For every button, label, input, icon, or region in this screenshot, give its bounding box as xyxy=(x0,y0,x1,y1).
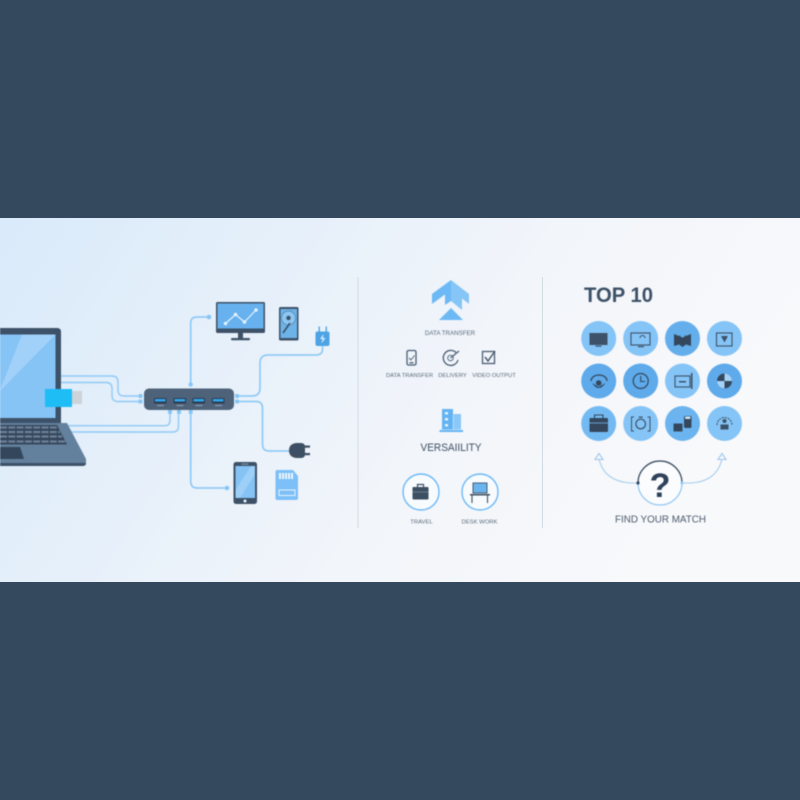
label: delivery: DELIVERY xyxy=(438,373,467,379)
icon: memory card xyxy=(276,470,298,500)
icon: travel briefcase xyxy=(403,474,439,510)
icon: delivery target xyxy=(443,350,459,365)
panel: connectivity diagram xyxy=(0,302,330,504)
cables: laptop to hub xyxy=(61,376,178,432)
laptop xyxy=(0,328,86,466)
icon: building xyxy=(440,409,463,432)
laptop base xyxy=(0,423,86,466)
label: data transfer: DATA TRANSFER xyxy=(425,330,476,337)
panel: features xyxy=(386,280,516,526)
icon: clock xyxy=(623,364,658,398)
panel: top 10 xyxy=(581,284,742,526)
icon: upload arrow xyxy=(432,280,469,320)
cable connector dots xyxy=(138,315,239,490)
icon: camera frame xyxy=(623,406,658,441)
icon: person orbit xyxy=(581,364,616,398)
label: travel: TRAVEL xyxy=(410,520,433,526)
usb hub xyxy=(144,388,234,410)
icon: monitor with chart xyxy=(216,302,265,340)
label: video output: VIDEO OUTPUT xyxy=(472,373,516,379)
icon: black plug xyxy=(289,443,310,458)
hub ports xyxy=(154,398,224,406)
icon: person gear xyxy=(707,406,742,441)
usb drive xyxy=(45,389,82,407)
icon: power adapter xyxy=(316,326,330,346)
icon: video output checkbox xyxy=(482,351,495,364)
question mark: ? xyxy=(650,467,670,505)
laptop screen xyxy=(0,328,61,423)
cables: hub to devices xyxy=(191,317,322,488)
icon: tv xyxy=(581,321,616,356)
icon: desk work xyxy=(462,474,498,510)
icon: map xyxy=(665,321,700,356)
label: data transfer small: DATA TRANSFER xyxy=(386,373,433,379)
icon: hard drive xyxy=(279,307,298,340)
icon: phone check xyxy=(407,350,416,365)
icon: shield screen xyxy=(707,321,742,356)
question mark circle xyxy=(636,461,684,505)
heading: versatility: VERSAIILITY xyxy=(420,442,482,454)
icon: blocks xyxy=(665,406,700,441)
icon: resize screen xyxy=(665,364,700,398)
icon: pie xyxy=(707,364,742,398)
heading: top 10: TOP 10 xyxy=(584,284,653,307)
icon: toolbox xyxy=(581,406,616,441)
icon grid xyxy=(581,321,742,441)
icon: smartphone xyxy=(234,462,257,504)
light content banner xyxy=(0,218,800,582)
trackpad xyxy=(0,447,24,459)
icon: monitor refresh xyxy=(623,321,658,356)
label: desk work: DESK WORK xyxy=(461,520,498,526)
keyboard xyxy=(0,425,67,444)
label: find your match: FIND YOUR MATCH xyxy=(615,514,706,526)
arrows to question xyxy=(595,454,726,483)
